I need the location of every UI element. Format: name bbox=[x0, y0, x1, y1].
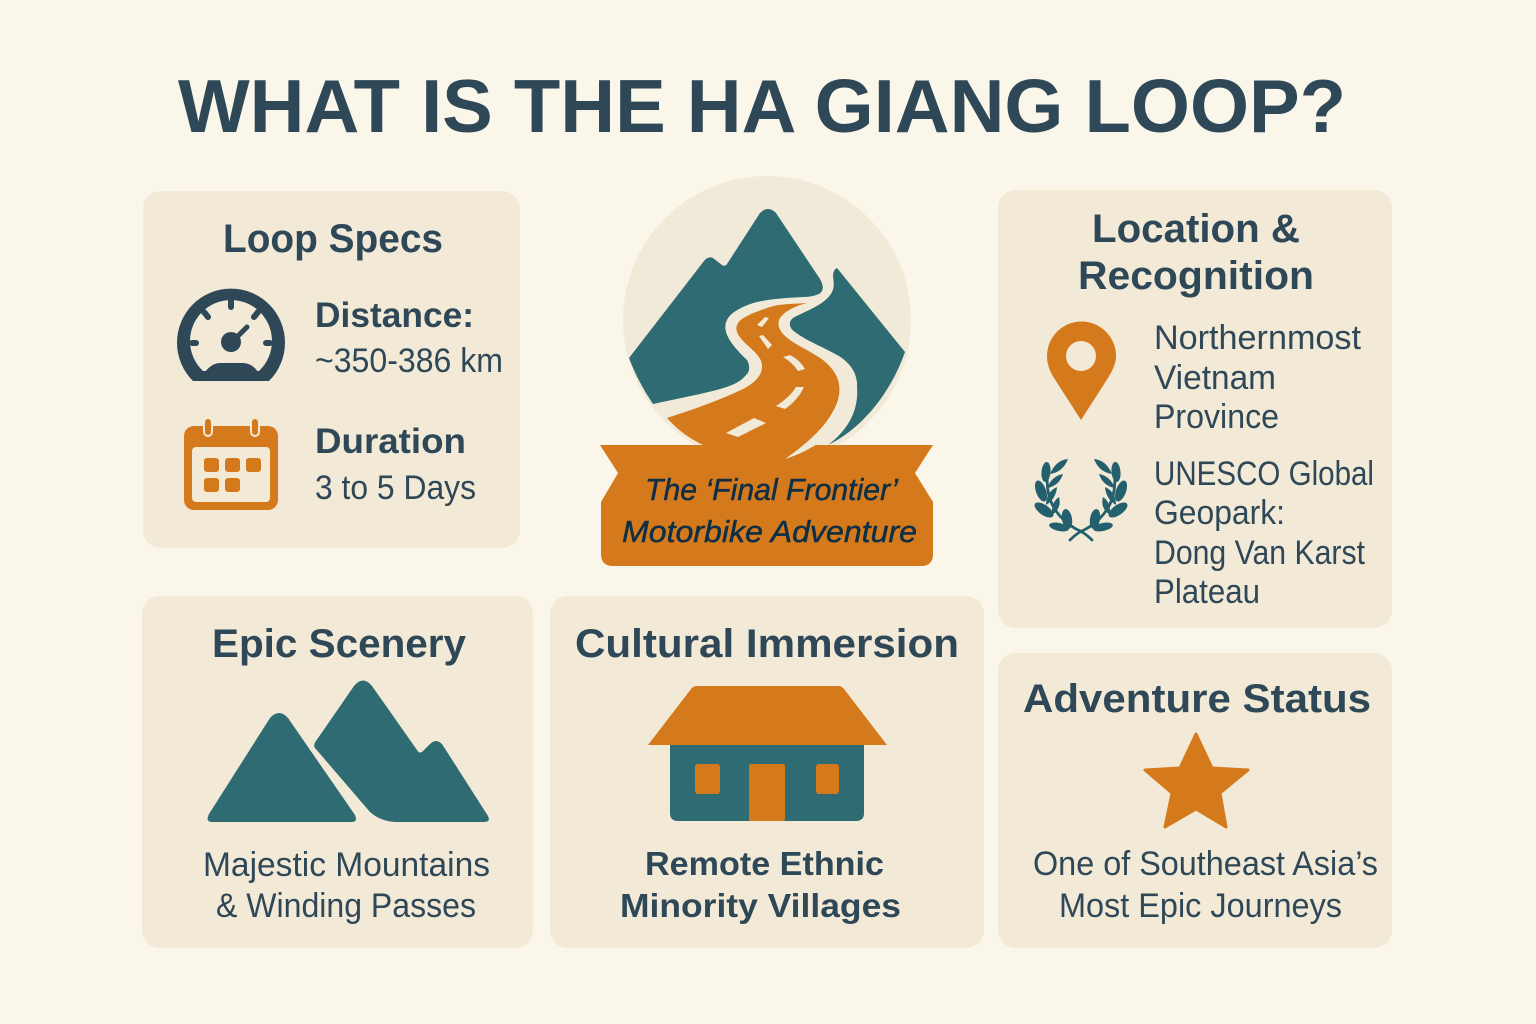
panel: location and recognition bbox=[998, 190, 1392, 628]
panel: loop specs bbox=[143, 191, 520, 548]
banner text: The ‘Final Frontier’ bbox=[645, 472, 899, 507]
heading: location and recognition: Location & bbox=[1092, 207, 1300, 251]
text: province: Province bbox=[1154, 398, 1279, 436]
text: province: Northernmost bbox=[1154, 319, 1362, 357]
text: duration label: Duration bbox=[315, 422, 466, 461]
text: unesco bbox=[1154, 455, 1374, 611]
text: province: Vietnam bbox=[1154, 359, 1276, 397]
banner text bbox=[622, 472, 917, 549]
banner bbox=[600, 445, 933, 566]
heading: epic scenery: Epic Scenery bbox=[212, 622, 467, 666]
text: cultural caption: Minority Villages bbox=[620, 887, 901, 924]
banner text: Motorbike Adventure bbox=[622, 514, 917, 549]
text: province bbox=[1154, 319, 1362, 436]
icon: laurel wreath bbox=[1032, 459, 1130, 540]
panel: adventure status bbox=[998, 653, 1392, 948]
text: adventure caption bbox=[1033, 845, 1378, 925]
text: adventure caption: One of Southeast Asia’s bbox=[1033, 845, 1378, 883]
icon: map pin bbox=[1047, 322, 1116, 420]
icon: star bbox=[1145, 734, 1248, 827]
heading: location and recognition bbox=[1078, 207, 1314, 298]
icon: speedometer bbox=[177, 289, 285, 381]
mountain: right bbox=[790, 268, 905, 445]
icon: calendar bbox=[184, 418, 278, 510]
mountain: left bbox=[629, 209, 823, 404]
icon: mountains bbox=[208, 680, 489, 822]
text: epic scenery caption bbox=[203, 846, 490, 925]
hero emblem: winding road and banner bbox=[600, 176, 933, 566]
heading: cultural immersion: Cultural Immersion bbox=[575, 622, 959, 666]
text: epic scenery caption: & Winding Passes bbox=[216, 887, 476, 925]
text: unesco: Dong Van Karst bbox=[1154, 534, 1365, 572]
heading: adventure status: Adventure Status bbox=[1023, 677, 1371, 721]
text: distance value: ~350-386 km bbox=[315, 342, 503, 380]
text: epic scenery caption: Majestic Mountains bbox=[203, 846, 490, 884]
road shoulder bbox=[785, 355, 857, 459]
icon: village house bbox=[648, 686, 887, 821]
text: unesco: Plateau bbox=[1154, 573, 1260, 611]
text: unesco: Geopark: bbox=[1154, 494, 1285, 532]
road centre dashes bbox=[726, 317, 805, 437]
heading: location and recognition: Recognition bbox=[1078, 254, 1314, 298]
text: cultural caption: Remote Ethnic bbox=[645, 845, 884, 882]
text: duration value: 3 to 5 Days bbox=[315, 469, 476, 507]
heading: loop specs: Loop Specs bbox=[223, 217, 443, 261]
text: distance label: Distance: bbox=[315, 296, 474, 335]
panel: epic scenery bbox=[142, 596, 533, 948]
road bbox=[667, 303, 839, 460]
title: WHAT IS THE HA GIANG LOOP? bbox=[178, 64, 1346, 148]
text: adventure caption: Most Epic Journeys bbox=[1059, 887, 1342, 925]
panel: cultural immersion bbox=[550, 596, 984, 948]
text: unesco: UNESCO Global bbox=[1154, 455, 1374, 493]
text: cultural caption bbox=[620, 845, 901, 924]
